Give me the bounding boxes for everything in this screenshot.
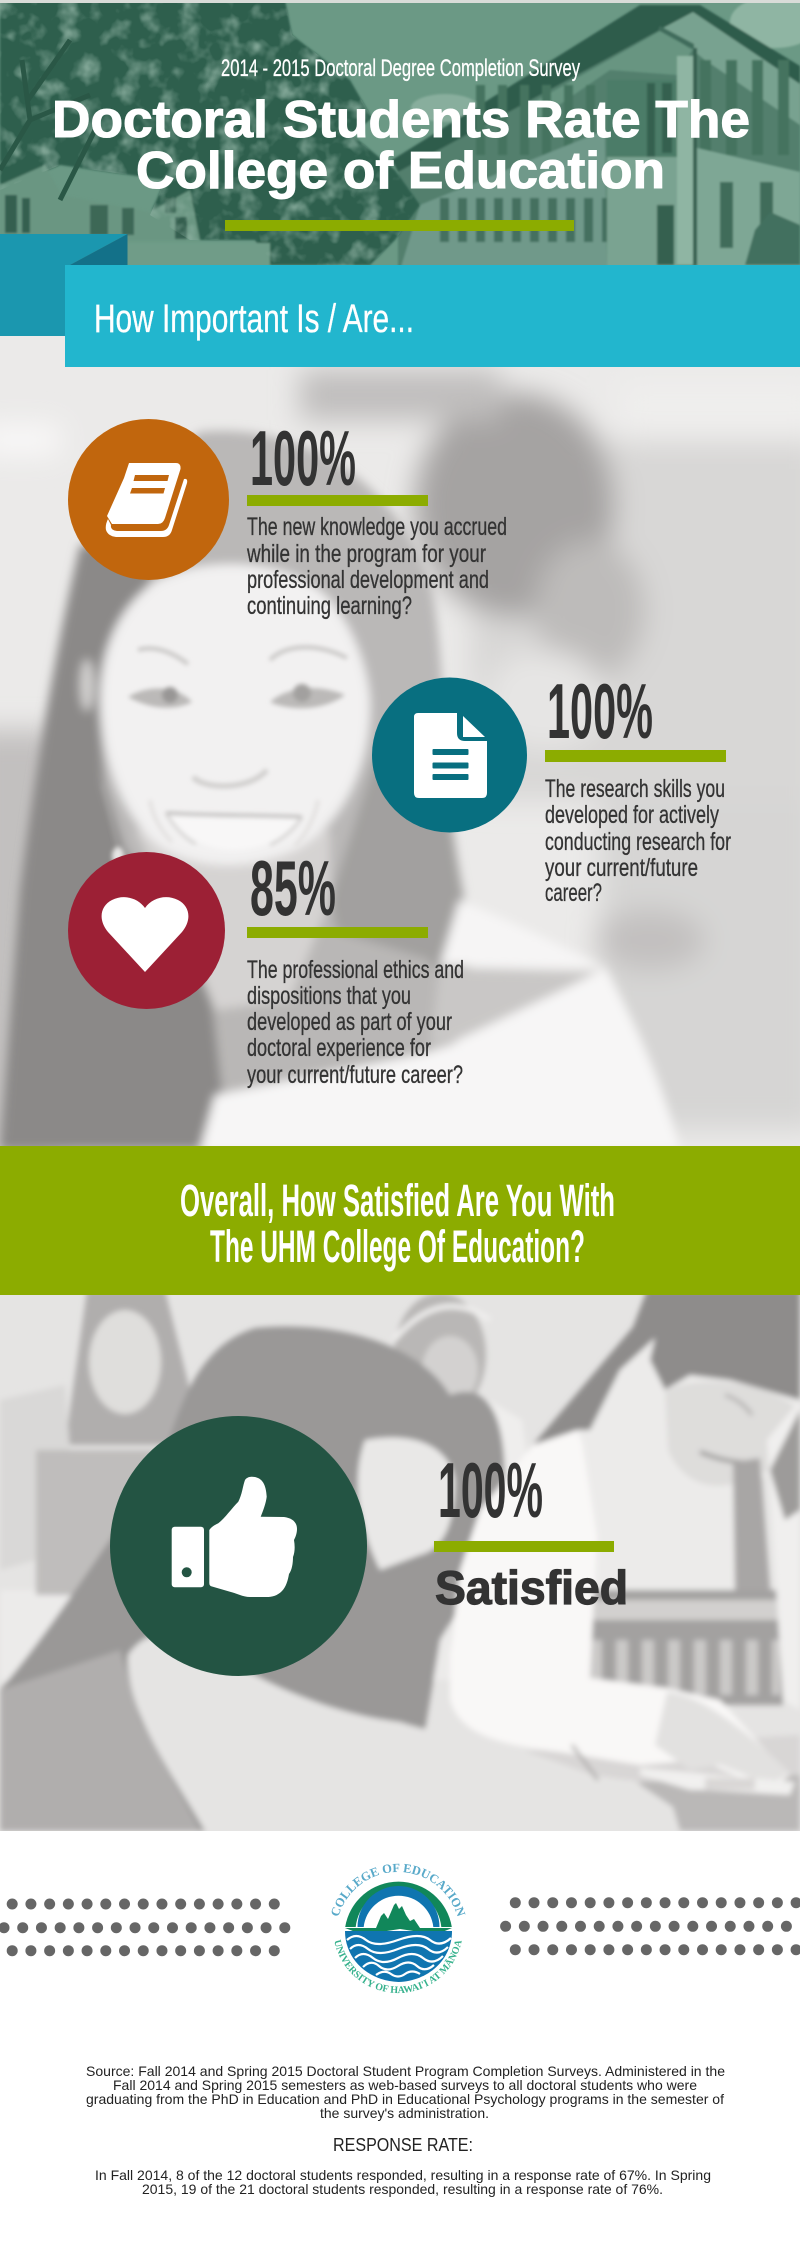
question text: your current/future career? bbox=[247, 1061, 463, 1089]
question text: The professional ethics and bbox=[247, 956, 464, 984]
stat: research skills bbox=[372, 667, 731, 907]
logo text top: COLLEGE OF EDUCATION bbox=[332, 1864, 466, 1916]
main student hair bbox=[0, 1327, 505, 1831]
white cardigan bbox=[450, 1430, 790, 1790]
source note: graduating from the PhD in Education and PhD in Educational Psychology programs in the semester of bbox=[86, 2091, 724, 2107]
table bbox=[505, 1735, 800, 1831]
question text: dispositions that you bbox=[247, 982, 411, 1010]
stat: ethics bbox=[68, 844, 464, 1089]
shirt bbox=[435, 896, 672, 1122]
back-left student bbox=[65, 1290, 192, 1445]
hand bbox=[655, 1692, 790, 1785]
icon: thumbs up bbox=[110, 1416, 367, 1676]
main student arm bbox=[128, 1634, 680, 1831]
stat: knowledge bbox=[68, 414, 507, 620]
question text: The new knowledge you accrued bbox=[247, 513, 507, 541]
question text: conducting research for bbox=[545, 828, 731, 856]
hair crown and right side bbox=[98, 426, 466, 1048]
logo text bottom: UNIVERSITY OF HAWAI'I AT MĀNOA bbox=[334, 1939, 462, 1994]
satisfied label: Satisfied bbox=[435, 1561, 628, 1614]
paper bbox=[640, 1768, 795, 1795]
question text: developed for actively bbox=[545, 801, 719, 829]
photo: smiling student background bbox=[0, 336, 800, 1160]
chest shadow bbox=[338, 938, 432, 1036]
icon: document bbox=[372, 678, 527, 832]
bottom-left hair bbox=[0, 1650, 200, 1831]
question text: your current/future bbox=[545, 854, 698, 882]
response rate heading: RESPONSE RATE: bbox=[333, 2135, 473, 2155]
main student face bbox=[358, 1437, 455, 1570]
logo: college of education seal bbox=[332, 1864, 466, 1994]
smile bbox=[166, 813, 302, 850]
question text: professional development and bbox=[247, 566, 489, 594]
icon: heart bbox=[68, 852, 225, 1009]
question text: developed as part of your bbox=[247, 1008, 452, 1036]
question text bbox=[247, 956, 464, 1089]
source note bbox=[86, 2063, 725, 2121]
laptop bbox=[36, 1450, 156, 1595]
percentage 85: 85% bbox=[250, 844, 336, 932]
question text: The research skills you bbox=[545, 775, 725, 803]
percentage 100: 100% bbox=[438, 1446, 543, 1534]
dot pattern left bbox=[4, 1904, 288, 1951]
dot pattern right bbox=[506, 1903, 800, 1950]
response rate text bbox=[95, 2167, 711, 2197]
stat: satisfied bbox=[110, 1416, 628, 1676]
source note: the survey's administration. bbox=[320, 2105, 489, 2121]
neck bbox=[135, 830, 330, 1010]
source note: Fall 2014 and Spring 2015 semesters as web-based surveys to all doctoral students who were bbox=[113, 2077, 697, 2093]
question text: continuing learning? bbox=[247, 592, 412, 620]
main title: Doctoral Students Rate The bbox=[52, 91, 750, 149]
eyebrows bbox=[138, 648, 188, 664]
left hair bbox=[0, 545, 222, 1150]
header panel with campus photo bbox=[0, 0, 800, 270]
main title: College of Education bbox=[136, 142, 665, 200]
question text: while in the program for your bbox=[246, 540, 486, 568]
banner heading: How Important Is / Are... bbox=[94, 297, 414, 341]
percentage 100: 100% bbox=[547, 667, 653, 755]
question text: career? bbox=[545, 879, 602, 907]
section banner: how important bbox=[0, 234, 800, 367]
main title bbox=[52, 91, 750, 200]
pencil bbox=[572, 1745, 598, 1780]
question text bbox=[545, 775, 731, 907]
banner heading bbox=[180, 1175, 615, 1272]
nose bbox=[193, 770, 267, 786]
response rate text: In Fall 2014, 8 of the 12 doctoral students responded, resulting in a response rate of 67%. In Spring bbox=[95, 2167, 711, 2183]
trees bbox=[0, 0, 420, 267]
percentage 100: 100% bbox=[250, 414, 356, 502]
patterned top bbox=[733, 1458, 770, 1590]
right student skin bbox=[577, 1338, 800, 1610]
section banner: overall satisfaction bbox=[0, 1146, 800, 1295]
green arch bbox=[345, 1882, 452, 1927]
response rate text: 2015, 19 of the 21 doctoral students responded, resulting in a response rate of 76%. bbox=[142, 2181, 663, 2197]
water bbox=[345, 1931, 452, 1982]
source note: Source: Fall 2014 and Spring 2015 Doctoral Student Program Completion Surveys. Administered in the bbox=[86, 2063, 725, 2079]
earring bbox=[103, 785, 118, 848]
eyes bbox=[128, 688, 192, 708]
photo: campus building and trees bbox=[0, 0, 800, 270]
hair strands and far sleeve bbox=[767, 1400, 800, 1710]
face bbox=[100, 564, 370, 865]
title accent bar bbox=[225, 220, 574, 231]
photo: students studying background bbox=[0, 1290, 800, 1831]
icon: book bbox=[68, 419, 229, 580]
ribbon fold bbox=[0, 234, 128, 336]
question text bbox=[246, 513, 507, 620]
blue arch bbox=[358, 1886, 440, 1927]
survey subtitle: 2014 - 2015 Doctoral Degree Completion Survey bbox=[221, 55, 580, 82]
back-right student bbox=[392, 1295, 488, 1394]
question text: doctoral experience for bbox=[247, 1034, 431, 1062]
mountains bbox=[345, 1903, 452, 1933]
right student hair bbox=[533, 1290, 800, 1445]
right student face bbox=[665, 1382, 800, 1486]
